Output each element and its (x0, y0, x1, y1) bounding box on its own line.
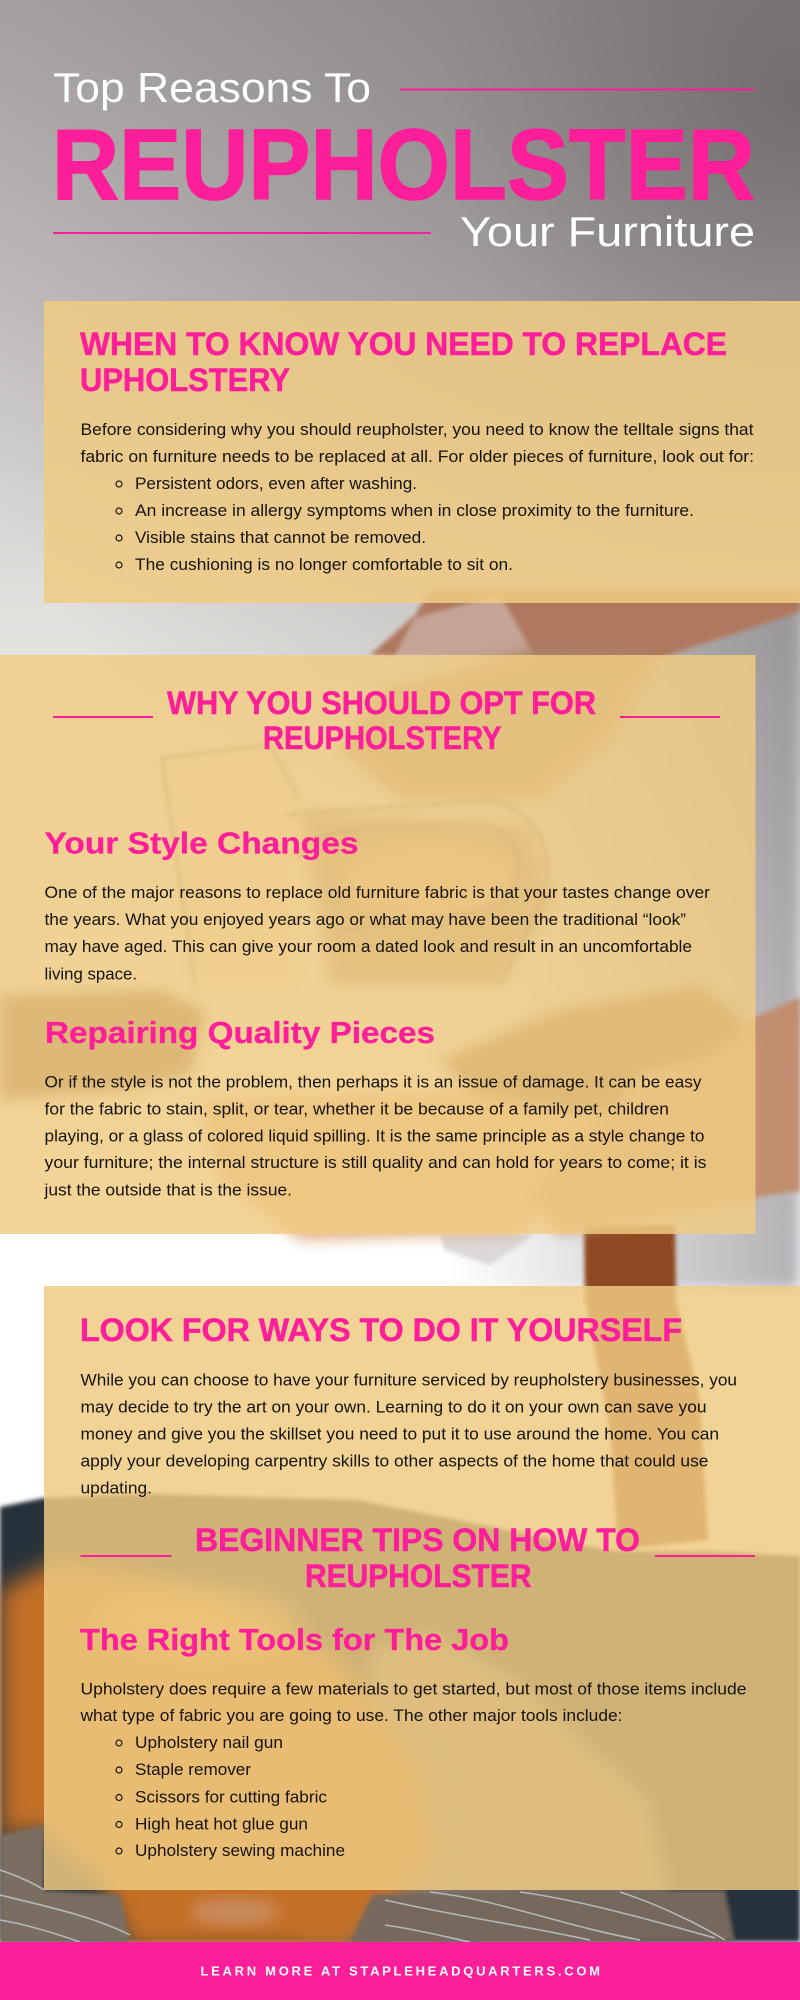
body: repairing quality pieces: Or if the style is not the problem, then perhaps it is an issue of damage. It can be easy (44, 1074, 702, 1092)
heading with side rules: BEGINNER TIPS ON HOW TO (195, 1522, 640, 1558)
body: repairing quality pieces: just the outside that is the issue. (43, 1182, 292, 1200)
tools list: Upholstery sewing machine (135, 1842, 345, 1860)
tools list (116, 1734, 345, 1860)
heading: UPHOLSTERY (80, 362, 290, 398)
bottom rule (53, 232, 431, 234)
body: repairing quality pieces: for the fabric to stain, split, or tear, whether it be because of a family pet, children (44, 1100, 669, 1118)
tools list: High heat hot glue gun (135, 1816, 308, 1834)
body: updating. (80, 1480, 152, 1498)
bullet list: Persistent odors, even after washing. (135, 475, 417, 493)
body: While you can choose to have your furniture serviced by reupholstery businesses, you (80, 1372, 737, 1390)
heading with side rules (80, 1522, 755, 1594)
heading with side rules: REUPHOLSTER (305, 1558, 532, 1594)
body: repairing quality pieces: your furniture; the internal structure is still quality and can hold for years to come; it is (44, 1154, 706, 1172)
body: your style changes: may have aged. This can give your room a dated look and result in an uncomfortable (44, 938, 692, 956)
body: Upholstery does require a few materials to get started, but most of those items include (80, 1680, 746, 1698)
panel: why opt for reupholstery (0, 655, 756, 1234)
main word: REUPHOLSTER (52, 109, 755, 221)
bullet list (116, 475, 694, 574)
panel: do it yourself (44, 1286, 800, 1890)
tools list: Upholstery nail gun (135, 1734, 283, 1752)
heading (80, 326, 727, 398)
title line 3: Your Furniture (460, 208, 755, 255)
intro text (80, 421, 754, 466)
subheading: your style changes: Your Style Changes (44, 826, 358, 860)
footer banner (0, 1942, 800, 2000)
heading with side rules: WHY YOU SHOULD OPT FOR (167, 685, 596, 721)
body: apply your developing carpentry skills to other aspects of the home that could use (80, 1452, 708, 1470)
body: repairing quality pieces (43, 1074, 706, 1200)
heading: WHEN TO KNOW YOU NEED TO REPLACE (80, 326, 727, 362)
body (80, 1372, 737, 1498)
body: your style changes: One of the major reasons to replace old furniture fabric is that your tastes change over (44, 884, 711, 902)
intro text: fabric on furniture needs to be replaced at all. For older pieces of furniture, look out for: (80, 448, 754, 466)
body: your style changes: living space. (44, 966, 137, 984)
bullet list: An increase in allergy symptoms when in close proximity to the furniture. (135, 502, 694, 520)
tools list: Staple remover (135, 1761, 252, 1779)
intro text: Before considering why you should reupholster, you need to know the telltale signs that (80, 421, 754, 439)
bullet list: Visible stains that cannot be removed. (135, 529, 426, 547)
top rule (400, 88, 755, 90)
subheading: repairing quality pieces: Repairing Quality Pieces (45, 1015, 435, 1050)
bullet list: The cushioning is no longer comfortable to sit on. (135, 556, 513, 574)
heading with side rules (53, 685, 720, 756)
tools list: Scissors for cutting fabric (135, 1788, 327, 1806)
footer banner: LEARN MORE AT STAPLEHEADQUARTERS.COM (200, 1964, 600, 1978)
title line 1: Top Reasons To (53, 64, 371, 111)
panel: when to replace (44, 301, 800, 603)
title block (52, 64, 755, 255)
body: your style changes (44, 884, 711, 984)
heading with side rules: REUPHOLSTERY (263, 720, 502, 756)
subheading: right tools: The Right Tools for The Job (80, 1622, 509, 1657)
body: your style changes: the years. What you enjoyed years ago or what may have been the traditional “look” (44, 911, 686, 929)
body: what type of fabric you are going to use. The other major tools include: (79, 1707, 622, 1725)
body: repairing quality pieces: playing, or a glass of colored liquid spilling. It is the same principle as a style change to (44, 1128, 704, 1146)
body: money and give you the skillset you need to put it to use around the home. You can (80, 1426, 719, 1444)
body: may decide to try the art on your own. Learning to do it on your own can save you (80, 1398, 706, 1416)
heading: LOOK FOR WAYS TO DO IT YOURSELF (80, 1312, 682, 1348)
body (79, 1680, 746, 1725)
